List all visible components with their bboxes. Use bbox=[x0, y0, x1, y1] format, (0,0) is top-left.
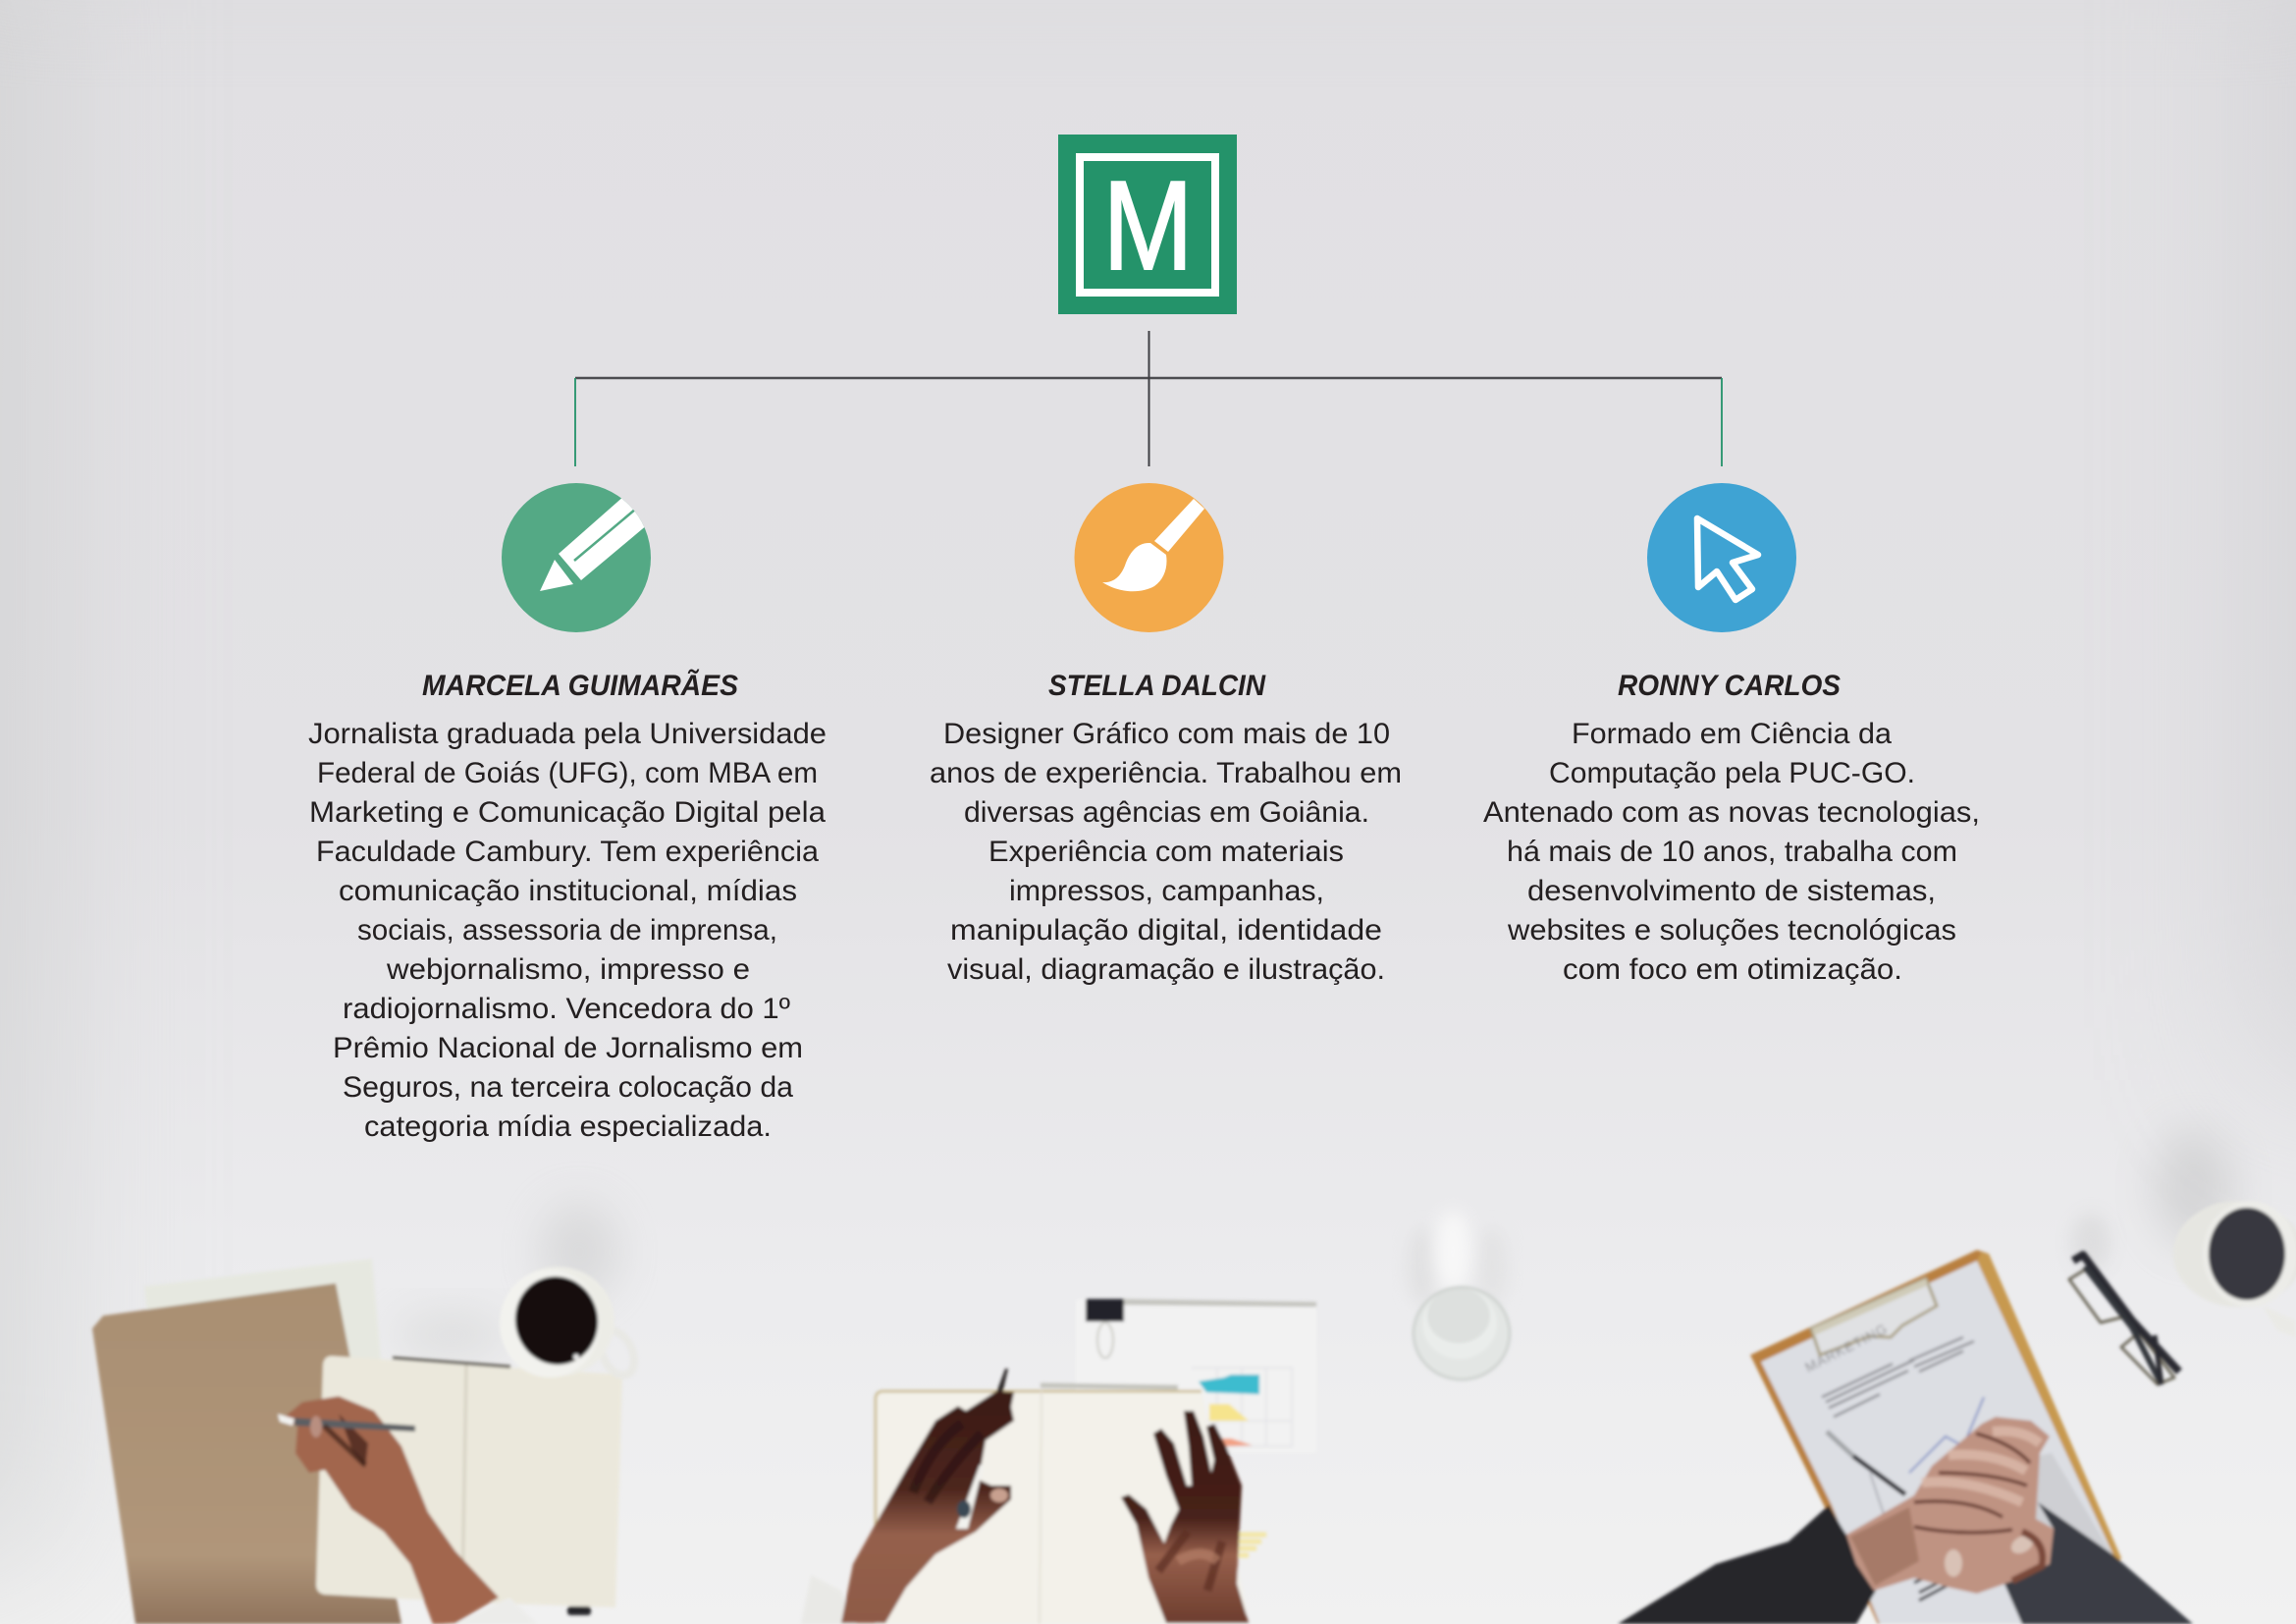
description: Ronny: desenvolvimento de sistemas, bbox=[1527, 875, 1936, 907]
coffee cup, left bbox=[500, 1267, 641, 1380]
clipboard bbox=[1750, 1250, 2121, 1624]
description: Stella: manipulação digital, identidade bbox=[950, 914, 1382, 947]
description: Marcela: categoria mídia especializada. bbox=[364, 1110, 772, 1143]
left arm sleeve bbox=[1618, 1505, 1876, 1624]
logo: green square with M bbox=[1058, 135, 1237, 314]
description: Stella: anos de experiência. Trabalhou em bbox=[930, 757, 1402, 789]
name: Marcela: MARCELA GUIMARÃES bbox=[422, 669, 738, 702]
description: Marcela: Seguros, na terceira colocação da bbox=[343, 1071, 794, 1104]
open notebook, left person bbox=[316, 1356, 622, 1615]
description: Ronny: Computação pela PUC-GO. bbox=[1549, 757, 1915, 789]
right arm sleeve bbox=[2004, 1502, 2193, 1624]
coffee cup, right bbox=[2173, 1201, 2296, 1337]
description: Stella: Experiência com materiais bbox=[988, 836, 1344, 868]
open notebook, centre person bbox=[876, 1385, 1247, 1624]
description: Ronny: Antenado com as novas tecnologias, bbox=[1483, 796, 1980, 829]
description: Marcela: Jornalista graduada pela Universidade bbox=[308, 718, 827, 750]
description: Marcela: Marketing e Comunicação Digital pela bbox=[309, 796, 827, 829]
hand writing with pen bbox=[278, 1396, 537, 1624]
description: Marcela: webjornalismo, impresso e bbox=[386, 953, 750, 986]
photo: meeting table objects bbox=[92, 1201, 2296, 1624]
glass of water bbox=[1414, 1287, 1510, 1380]
description: Stella: diversas agências em Goiânia. bbox=[964, 796, 1369, 829]
right hand, centre person bbox=[1121, 1411, 1249, 1623]
description: Ronny: websites e soluções tecnológicas bbox=[1507, 914, 1956, 947]
clipboard heading: MARKETING bbox=[1802, 1321, 1891, 1376]
icon: paintbrush in orange circle bbox=[1074, 483, 1223, 632]
left hand, centre person bbox=[801, 1391, 1014, 1624]
description: Marcela bbox=[308, 718, 827, 1143]
pen in left hand, centre bbox=[987, 1369, 1008, 1420]
kraft folder bbox=[92, 1283, 401, 1624]
name: Stella: STELLA DALCIN bbox=[1048, 670, 1266, 702]
description: Stella bbox=[930, 718, 1402, 986]
bio: Stella Dalcin bbox=[930, 670, 1402, 986]
description: Stella: visual, diagramação e ilustração. bbox=[947, 953, 1385, 986]
description: Marcela: Prêmio Nacional de Jornalismo em bbox=[333, 1032, 803, 1064]
org chart connectors bbox=[575, 331, 1722, 466]
description: Marcela: Federal de Goiás (UFG), com MBA em bbox=[317, 757, 818, 789]
description: Ronny: há mais de 10 anos, trabalha com bbox=[1507, 836, 1957, 868]
bio: Marcela Guimarães bbox=[308, 669, 827, 1143]
description: Stella: impressos, campanhas, bbox=[1009, 875, 1324, 907]
bio: Ronny Carlos bbox=[1483, 670, 1980, 986]
description: Marcela: Faculdade Cambury. Tem experiência bbox=[316, 836, 820, 868]
description: Ronny bbox=[1483, 718, 1980, 986]
name: Ronny: RONNY CARLOS bbox=[1618, 670, 1841, 702]
paper with binder clip bbox=[1076, 1299, 1316, 1555]
logo letter: M bbox=[1103, 155, 1194, 297]
description: Marcela: comunicação institucional, mídias bbox=[339, 875, 797, 907]
description: Marcela: radiojornalismo. Vencedora do 1º bbox=[343, 993, 790, 1025]
white sheet behind folder bbox=[144, 1259, 381, 1360]
description: Stella: Designer Gráfico com mais de 10 bbox=[943, 718, 1390, 750]
description: Ronny: com foco em otimização. bbox=[1563, 953, 1902, 986]
clasped hands bbox=[1846, 1417, 2054, 1594]
eyeglasses bbox=[2069, 1255, 2179, 1384]
description: Ronny: Formado em Ciência da bbox=[1572, 718, 1893, 750]
icon: pencil in green circle bbox=[502, 483, 651, 632]
clipboard clip bbox=[1811, 1278, 1937, 1355]
description: Marcela: sociais, assessoria de imprensa, bbox=[357, 914, 777, 947]
icon: mouse cursor in blue circle bbox=[1647, 483, 1796, 632]
